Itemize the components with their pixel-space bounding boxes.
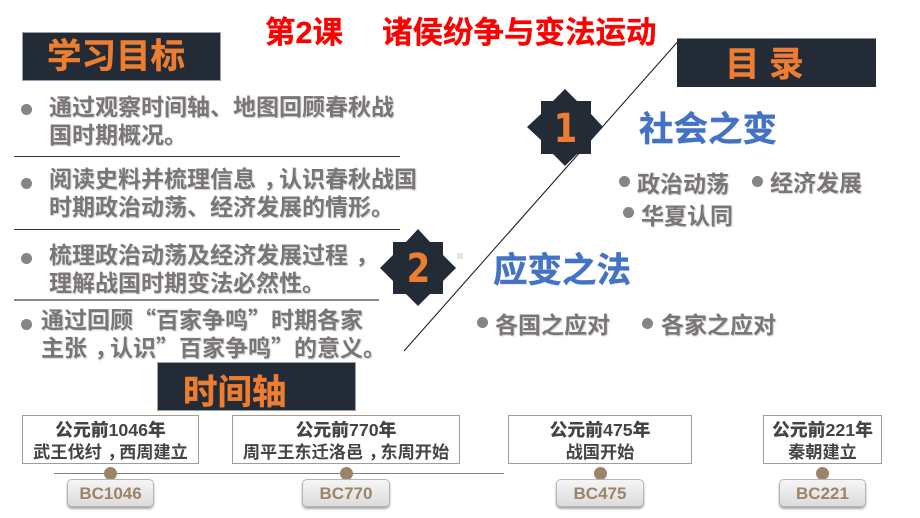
heading: contents: 目 录 <box>725 46 804 84</box>
heading: timeline <box>157 362 356 411</box>
goal 1 <box>21 94 395 148</box>
heading: timeline: 时间轴 <box>183 374 286 412</box>
badge 2 <box>380 229 456 306</box>
section 2 items <box>477 312 776 338</box>
goal 2 <box>21 166 417 220</box>
title: 第2课 <box>265 16 343 50</box>
event 3 <box>508 415 692 464</box>
goal 1: 通过观察时间轴、地图回顾春秋战 <box>49 94 394 120</box>
section 1 items <box>619 170 862 229</box>
goal 4: 通过回顾“百家争鸣”时期各家 <box>41 301 363 335</box>
goal 3 <box>21 242 378 296</box>
event 4: 公元前221年 <box>772 420 873 440</box>
date tag 1: BC1046 <box>79 484 142 503</box>
section 2 items: 各国之应对 <box>495 312 610 338</box>
event 1 <box>22 415 199 464</box>
section 1 items: 华夏认同 <box>641 203 733 229</box>
event 1: 公元前1046年 <box>55 420 166 440</box>
section 2 items: 各家之应对 <box>661 312 776 338</box>
heading: section 1: 社会之变 <box>639 111 777 149</box>
text: 诸侯纷争与变法运动 <box>382 16 656 50</box>
heading: learning goals: 学习目标 <box>47 38 185 76</box>
date tag 2: BC770 <box>320 484 372 503</box>
section 1 items: 经济发展 <box>770 170 862 196</box>
goal 2: 阅读史料并梳理信息 ，认识春秋战国 <box>49 166 417 192</box>
goal 4: 主张 ，认识”百家争鸣”的意义。 <box>41 329 386 363</box>
goal 3: 梳理政治动荡及经济发展过程 ， <box>49 242 378 268</box>
date tag 3 <box>556 479 644 507</box>
date tag 1 <box>67 479 154 507</box>
date tag 4 <box>779 479 866 507</box>
event 2: 公元前770年 <box>296 420 396 440</box>
title <box>265 16 656 50</box>
marker 2 <box>340 467 353 480</box>
section 1 items: 政治动荡 <box>637 171 729 197</box>
heading: section 2: 应变之法 <box>493 252 631 290</box>
badge 2: 2 <box>407 245 430 292</box>
goal 4 <box>21 301 386 363</box>
date tag 3: BC475 <box>574 484 626 503</box>
goal 3: 理解战国时期变法必然性。 <box>49 270 325 296</box>
marker 4 <box>816 467 829 480</box>
badge 1 <box>527 89 603 166</box>
event 1: 武王伐纣 ，西周建立 <box>33 442 188 462</box>
goal 2: 时期政治动荡、经济发展的情形。 <box>49 194 394 220</box>
date tag 2 <box>302 479 390 507</box>
event 2: 周平王东迁洛邑 ，东周开始 <box>243 442 449 462</box>
badge 1: 1 <box>554 105 577 152</box>
event 4 <box>763 415 882 464</box>
marker 1 <box>104 467 117 480</box>
event 4: 秦朝建立 <box>788 442 857 462</box>
event 2 <box>232 415 460 464</box>
event 3: 战国开始 <box>566 442 634 462</box>
event 3: 公元前475年 <box>550 420 650 440</box>
heading: learning goals <box>22 32 221 81</box>
marker 3 <box>594 467 607 480</box>
heading: contents <box>677 38 876 87</box>
goal 1: 国时期概况。 <box>49 122 187 148</box>
date tag 4: BC221 <box>796 484 849 503</box>
timeline axis <box>54 473 504 474</box>
